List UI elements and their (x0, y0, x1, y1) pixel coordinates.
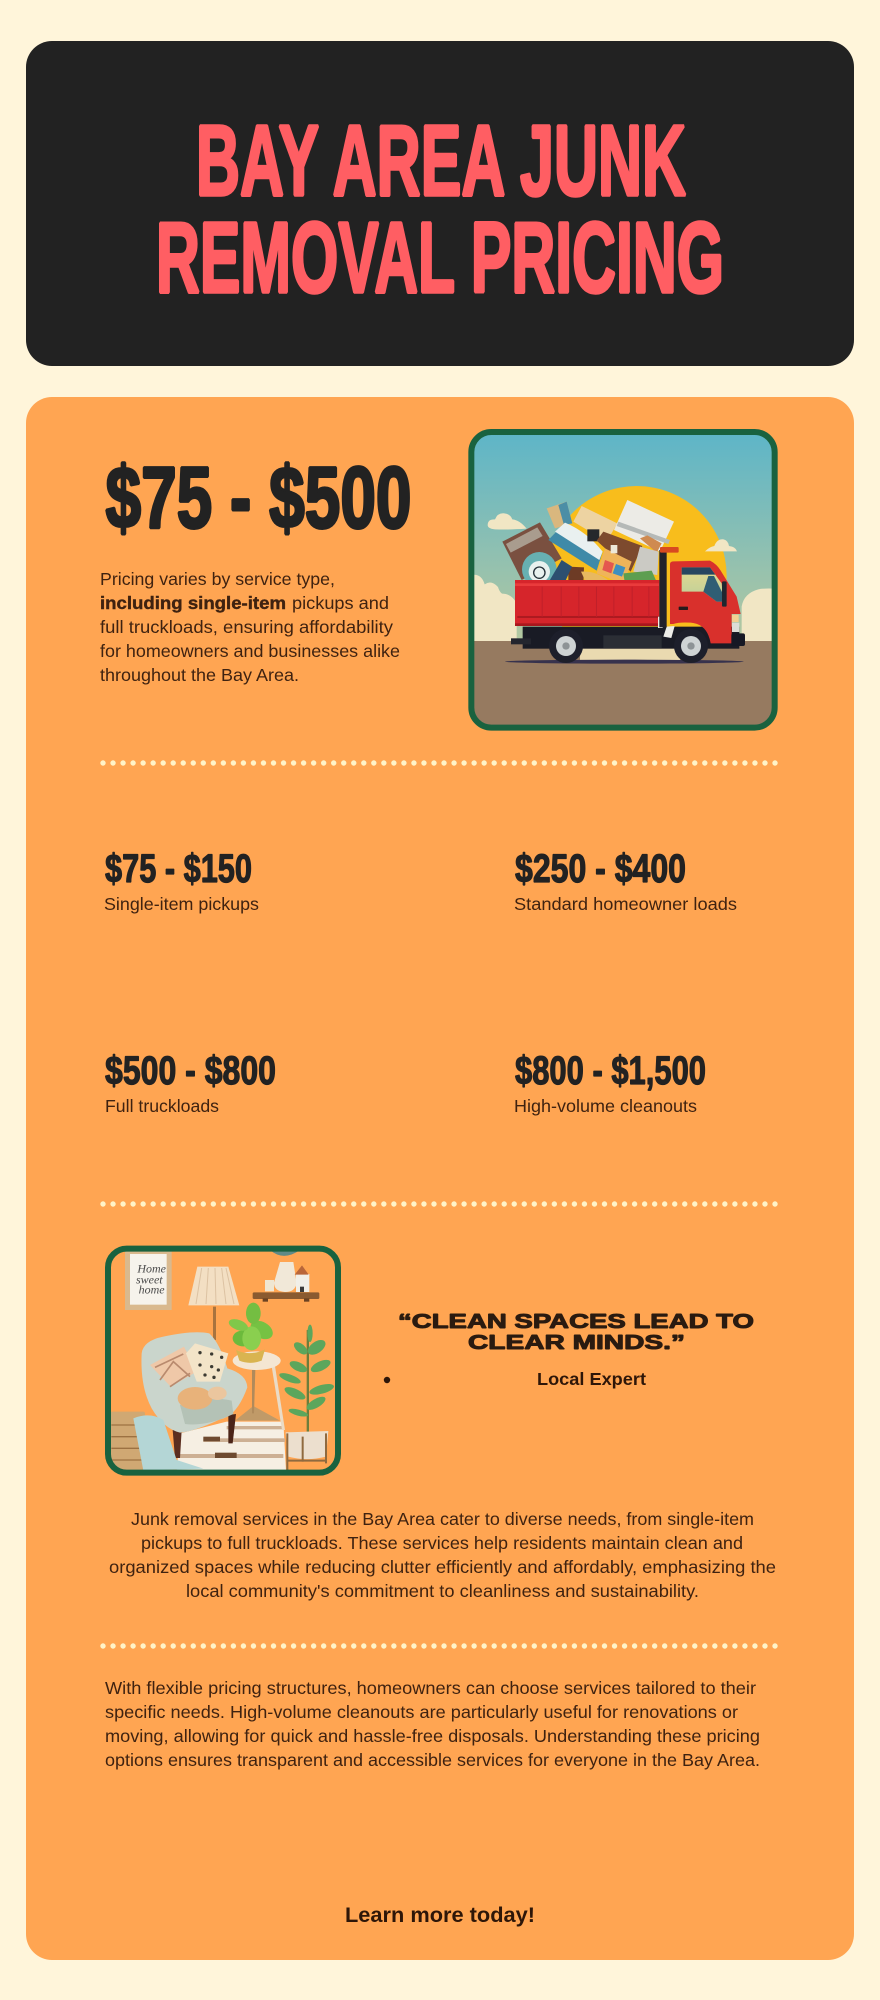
headline price range: $75 - $500 (106, 450, 412, 546)
centered paragraph: local community's commitment to cleanliness and sustainability. (186, 1581, 699, 1601)
image: cozy living room: Home (136, 1262, 167, 1276)
panel: title header (26, 41, 854, 366)
closing paragraph: specific needs. High-volume cleanouts are particularly useful for renovations or (105, 1702, 738, 1722)
quote (398, 1311, 754, 1354)
panel: pricing content (26, 397, 854, 1960)
image: cozy living room: home (139, 1282, 165, 1296)
rug (177, 1422, 286, 1471)
cab (670, 561, 741, 643)
price tier: full truckloads: $500 - $800 (105, 1049, 276, 1093)
intro paragraph (100, 569, 400, 685)
wall shelf (272, 1252, 298, 1256)
price tier: high-volume cleanouts: $800 - $1,500 (515, 1049, 706, 1093)
title (156, 105, 724, 314)
floor lamp (213, 1307, 216, 1340)
intro paragraph: full truckloads, ensuring affordability (100, 617, 393, 637)
exhaust pipe (659, 550, 667, 627)
closing paragraph (105, 1678, 760, 1770)
price tier: standard homeowner loads: $250 - $400 (515, 847, 686, 891)
centered paragraph: pickups to full truckloads. These services help residents maintain clean and (141, 1533, 743, 1553)
closing paragraph: With flexible pricing structures, homeowners can choose services tailored to their (105, 1678, 756, 1698)
intro paragraph: Pricing varies by service type, (100, 569, 335, 589)
centered paragraph: organized spaces while reducing clutter efficiently and affordably, emphasizing the (109, 1557, 776, 1577)
centered paragraph: Junk removal services in the Bay Area cater to diverse needs, from single-item (131, 1509, 754, 1529)
image: cozy living room (108, 1249, 338, 1473)
potted tree (307, 1330, 309, 1432)
image: junk removal truck (471, 432, 775, 728)
armchair (173, 1430, 182, 1458)
quote attribution (384, 1369, 646, 1389)
centered paragraph (109, 1509, 776, 1601)
call to action: Learn more today! (345, 1904, 535, 1927)
price tier: full truckloads (105, 1049, 276, 1116)
cloud shapes (488, 513, 527, 530)
price tier: standard homeowner loads (514, 847, 737, 914)
image: cozy living room: sweet (136, 1272, 163, 1286)
closing paragraph: moving, allowing for quick and hassle-free disposals. Understanding these pricing (105, 1726, 760, 1746)
price tier: single-item pickups: $75 - $150 (105, 847, 252, 891)
price tier: standard homeowner loads: Standard homeowner loads (514, 894, 737, 914)
quote attribution: Local Expert (537, 1369, 646, 1389)
quote: “CLEAN SPACES LEAD TO (398, 1311, 754, 1333)
price tier: high-volume cleanouts: High-volume cleanouts (514, 1096, 697, 1116)
pillows and cat (150, 1347, 197, 1387)
price tier: high-volume cleanouts (514, 1049, 706, 1116)
basket and blanket (110, 1412, 145, 1472)
intro paragraph: for homeowners and businesses alike (100, 641, 400, 661)
closing paragraph: options ensures transparent and accessible services for everyone in the Bay Area. (105, 1750, 760, 1770)
side table (252, 1370, 255, 1413)
truck load (547, 502, 572, 528)
price tier: full truckloads: Full truckloads (105, 1096, 219, 1116)
quote: CLEAR MINDS.” (468, 1332, 685, 1354)
chassis (523, 627, 739, 649)
intro paragraph: pickups and (292, 593, 389, 613)
intro paragraph: including single-item (100, 593, 286, 613)
table plant (236, 1349, 265, 1363)
wheels (549, 636, 708, 663)
price tier: single-item pickups: Single-item pickups (104, 894, 259, 914)
intro paragraph: throughout the Bay Area. (100, 665, 299, 685)
truck bed (515, 580, 659, 626)
picture frame (125, 1251, 172, 1310)
price tier: single-item pickups (104, 847, 259, 914)
